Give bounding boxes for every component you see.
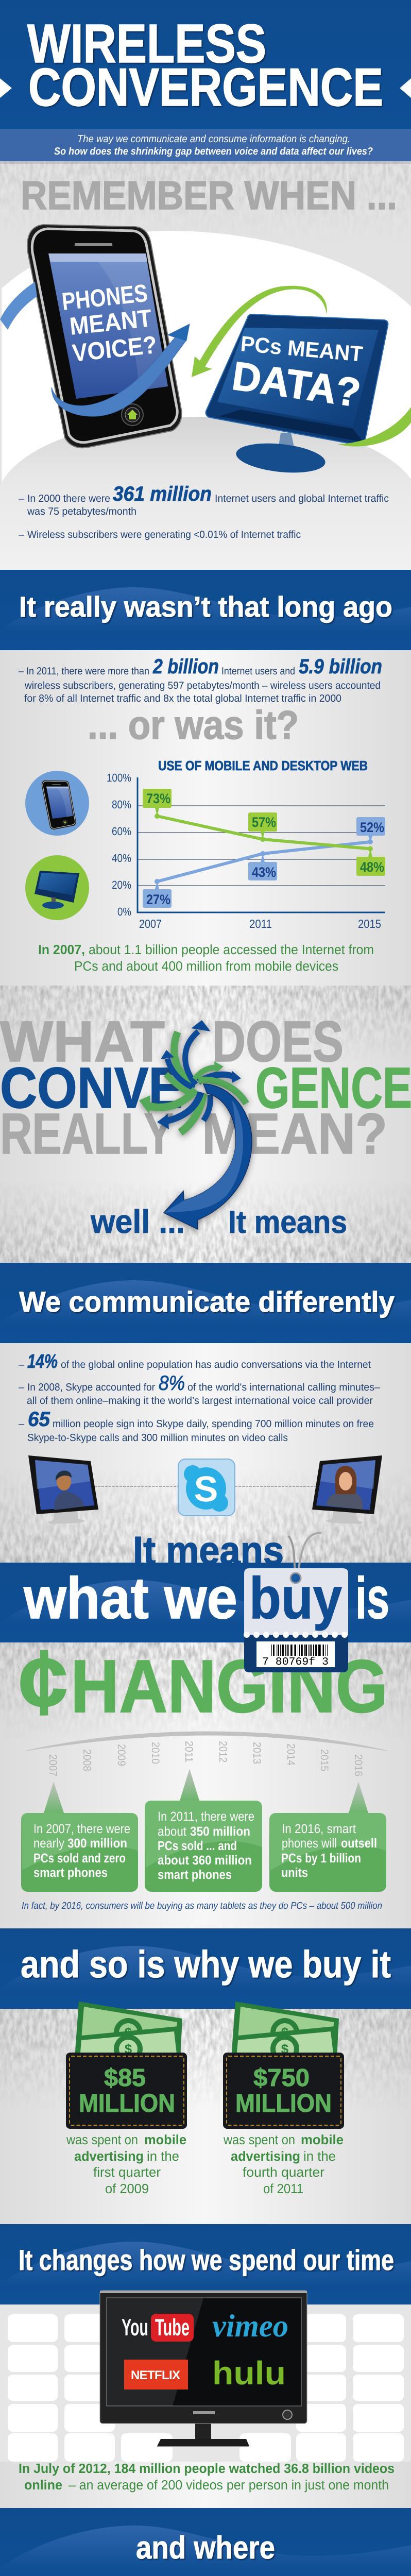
title: WIRELESS xyxy=(27,13,266,74)
panel: wallet 85 million: MILLION xyxy=(79,2089,175,2117)
panel: 2016 sales xyxy=(269,1782,386,1892)
text: mobile advertising 2009: mobile xyxy=(144,2132,186,2147)
text: mobile advertising 2009: advertising xyxy=(74,2148,144,2164)
icon: right diamond xyxy=(400,78,411,98)
barcode xyxy=(256,1641,335,1668)
heading: what does convergence really mean xyxy=(0,1009,411,1166)
text: it means: It means xyxy=(133,1529,284,1573)
panel: 2016 sales: units xyxy=(281,1866,308,1880)
header band xyxy=(0,0,411,129)
text: skype facts: In 2008, Skype accounted for xyxy=(27,1382,155,1393)
text: 2007 caption: In 2007, xyxy=(38,942,85,957)
value labels xyxy=(143,789,385,908)
markers xyxy=(155,808,373,857)
text: well it means: It means xyxy=(228,1205,347,1240)
panel: 2011 sales: about 360 million xyxy=(158,1853,252,1868)
text: year 2000 facts: was 75 petabytes/month xyxy=(27,506,136,517)
band: it really wasn't that long ago: It really wasn’t that long ago xyxy=(19,590,392,623)
timeline years: 2016 xyxy=(352,1754,364,1776)
text: 2011 facts: 2 billion xyxy=(152,655,219,678)
logo: netflix: NETFLIX xyxy=(131,2368,180,2382)
timeline years: 2013 xyxy=(251,1742,263,1764)
illustration: phone xyxy=(27,225,182,448)
arrow: blue swoosh xyxy=(0,282,190,416)
heading: what does convergence really mean: CONVE xyxy=(0,1056,183,1120)
illustration: monitor xyxy=(206,314,388,477)
text: skype facts: of the global online population has audio conversations via the Internet xyxy=(61,1359,371,1370)
tv body xyxy=(100,2291,307,2424)
logo: netflix xyxy=(124,2360,188,2389)
y axis labels: 60% xyxy=(112,825,131,838)
illustration: monitor: DATA? xyxy=(230,353,363,416)
text: skype facts: 14% xyxy=(27,1351,58,1372)
section: screens wall background xyxy=(0,2304,411,2508)
band: what we buy is xyxy=(0,1563,411,1642)
illustration: money left: $ xyxy=(125,2025,132,2040)
panel: wallet 85 million xyxy=(66,2053,187,2129)
section: convergence question background xyxy=(0,986,411,1263)
heading: or was it: ... or was it? xyxy=(88,702,299,748)
section: communicate background xyxy=(0,1343,411,1563)
text: well it means xyxy=(90,1203,347,1240)
logo: vimeo: vimeo xyxy=(212,2309,288,2344)
panel: 2007 sales: PCs sold and zero xyxy=(33,1851,126,1866)
timeline years: 2007 xyxy=(47,1754,59,1776)
text: skype facts: 65 xyxy=(28,1408,50,1431)
y axis labels: 40% xyxy=(112,852,131,865)
text: year 2000 facts: 361 million xyxy=(113,483,212,505)
section: or was it background xyxy=(0,650,411,986)
timeline arc xyxy=(26,1732,387,1751)
text: july 2012 videos xyxy=(19,2461,395,2493)
text: 2007 caption xyxy=(38,942,374,974)
text: year 2000 facts: Wireless subscribers were generating <0.01% of Internet traffic xyxy=(27,529,301,540)
band: what we buy is: what we xyxy=(23,1566,237,1631)
value labels: 73% xyxy=(146,791,170,806)
value labels: 52% xyxy=(360,820,384,835)
text: year 2000 facts: – xyxy=(19,529,25,540)
subtitle band xyxy=(0,129,411,164)
icon: monitor circle xyxy=(25,855,89,920)
timeline years xyxy=(47,1741,364,1776)
text: mobile advertising 2009: in the xyxy=(147,2148,179,2164)
band: and where: and where xyxy=(136,2530,275,2566)
icon: left diamond xyxy=(0,78,12,98)
text: skype facts: – xyxy=(19,1418,25,1430)
panel: 2011 sales: 350 million xyxy=(190,1824,250,1839)
title xyxy=(27,13,383,117)
text: mobile advertising 2011: of 2011 xyxy=(263,2181,303,2196)
text: 2011 facts: 5.9 billion xyxy=(299,655,382,678)
band: it really wasn't that long ago xyxy=(0,570,411,650)
text: mobile advertising 2009: was spent on xyxy=(66,2132,138,2147)
arrow: green swoosh xyxy=(192,286,411,447)
band: and so is why we buy it xyxy=(0,1928,411,2009)
heading: changing xyxy=(19,1631,388,1733)
y axis labels: 20% xyxy=(112,878,131,891)
text: 2007 caption: PCs and about 400 million from mobile devices xyxy=(74,958,338,974)
illustration: phone: VOICE? xyxy=(71,331,158,367)
panel: 2011 sales: smart phones xyxy=(158,1868,232,1882)
text: year 2000 facts xyxy=(19,483,389,540)
text: well it means: well ... xyxy=(90,1203,185,1240)
icon: skype: S xyxy=(194,1469,218,1509)
subtitle band: The way we communicate and consume information is changing. xyxy=(77,133,350,145)
icon: price tag with buy: buy xyxy=(249,1566,342,1631)
text: mobile advertising 2011: mobile xyxy=(301,2132,344,2147)
panel: 2007 sales: In 2007, there were xyxy=(33,1822,130,1836)
panel: 2007 sales: smart phones xyxy=(33,1866,108,1880)
logo: hulu: hulu xyxy=(212,2354,286,2392)
text: 2011 facts: wireless subscribers, generating 597 petabytes/month – wireless users accounted xyxy=(24,680,381,691)
icon: skype xyxy=(178,1459,235,1516)
text: skype facts: all of them online–making it the world’s largest international voice call provider xyxy=(27,1395,373,1406)
illustration: money left xyxy=(75,2002,182,2063)
panel: 2011 sales: about xyxy=(158,1824,186,1839)
text: 2007 caption: about 1.1 billion people accessed the Internet from xyxy=(89,942,374,957)
text: mobile advertising 2009: first quarter xyxy=(93,2164,161,2180)
text: mobile advertising 2011 xyxy=(223,2132,344,2196)
text: july 2012 videos: online xyxy=(24,2477,62,2493)
text: 2011 facts: Internet users and xyxy=(221,666,295,677)
text: skype facts: 8% xyxy=(159,1372,185,1395)
value labels: 27% xyxy=(146,892,170,907)
band: what we buy is: is xyxy=(355,1566,389,1631)
chart title: USE OF MOBILE AND DESKTOP WEB xyxy=(158,758,368,773)
panel: wallet 750 million: MILLION xyxy=(235,2089,332,2117)
panel: wallet 750 million: $750 xyxy=(253,2064,310,2092)
illustration: right video monitor xyxy=(312,1455,382,1524)
x axis labels: 2015 xyxy=(358,917,381,930)
timeline years: 2010 xyxy=(149,1742,161,1764)
illustration: left video monitor xyxy=(28,1455,98,1524)
panel: 2011 sales xyxy=(145,1769,262,1892)
panel: 2016 sales: In 2016, smart xyxy=(282,1822,356,1836)
text: mobile advertising 2011: was spent on xyxy=(223,2132,295,2147)
desktop line xyxy=(157,816,370,849)
timeline years: 2008 xyxy=(81,1749,93,1771)
text: skype facts: Skype-to-Skype calls and 300 million minutes on video calls xyxy=(27,1432,288,1444)
barcode: 7 80769f 3 xyxy=(262,1656,329,1668)
x axis labels: 2011 xyxy=(249,917,272,930)
illustration: phone: MEANT xyxy=(68,305,153,341)
band: and where xyxy=(0,2508,411,2576)
text: skype facts: – xyxy=(19,1382,25,1393)
panel: 2011 sales: PCs sold ... and xyxy=(158,1839,237,1853)
illustration: money right xyxy=(231,2002,339,2063)
panel: 2011 sales: In 2011, there were xyxy=(158,1809,254,1824)
illustration: monitor: PCs MEANT xyxy=(239,331,364,366)
text: mobile advertising 2011: in the xyxy=(303,2148,336,2164)
logo: youtube xyxy=(122,2314,194,2342)
heading: what does convergence really mean: MEAN? xyxy=(202,1101,387,1166)
text: skype facts: – xyxy=(19,1359,25,1370)
text: mobile advertising 2009 xyxy=(66,2132,186,2196)
value labels: 43% xyxy=(252,865,276,880)
heading: what does convergence really mean: WHAT xyxy=(0,1009,165,1074)
section: advertising background xyxy=(0,2009,411,2224)
section: changing background xyxy=(0,1642,411,1928)
panel: 2007 sales: 300 million xyxy=(67,1836,127,1851)
subtitle band: So how does the shrinking gap between voice and data affect our lives? xyxy=(54,146,373,157)
illustration: tv with video services xyxy=(100,2291,307,2447)
timeline years: 2009 xyxy=(115,1744,127,1766)
text: 2011 facts: for 8% of all Internet traffic and 8x the total global Internet traffic in 2000 xyxy=(24,693,341,704)
value labels: 48% xyxy=(360,859,384,875)
panel: 2007 sales: nearly xyxy=(33,1836,64,1851)
section: remember when background xyxy=(0,161,411,485)
heading: what does convergence really mean: REALLY xyxy=(0,1101,174,1166)
timeline xyxy=(26,1732,387,1776)
text: july 2012 videos: – an average of 200 videos per person in just one month xyxy=(68,2477,389,2493)
chart: use of mobile and desktop web xyxy=(107,758,385,930)
timeline years: 2012 xyxy=(217,1741,229,1762)
text: skype facts: million people sign into Skype daily, spending 700 million minutes on free xyxy=(53,1418,374,1430)
band: we communicate differently xyxy=(0,1263,411,1343)
y axis labels: 0% xyxy=(117,905,131,918)
text: skype facts: of the world's international calling minutes– xyxy=(187,1382,381,1393)
x axis labels: 2007 xyxy=(139,917,162,930)
band: it changes how we spend our time xyxy=(0,2224,411,2304)
text: july 2012 videos: In July of 2012, 184 million people watched 36.8 billion videos xyxy=(19,2461,395,2476)
text: 2011 facts: – In 2011, there were more than xyxy=(19,666,149,677)
heading: what does convergence really mean: DOES xyxy=(212,1009,344,1074)
logo: youtube: You xyxy=(122,2314,148,2341)
text: year 2000 facts: Internet users and global Internet traffic xyxy=(215,493,389,504)
tv stand xyxy=(195,2424,211,2441)
heading: changing: ¢ xyxy=(19,1631,68,1733)
text: skype facts xyxy=(19,1351,381,1444)
panel: wallet 750 million xyxy=(223,2053,344,2129)
text: mobile advertising 2011: advertising xyxy=(231,2148,300,2164)
timeline years: 2015 xyxy=(318,1749,330,1771)
text: year 2000 facts: – xyxy=(19,493,25,504)
panel: 2016 sales: phones will xyxy=(282,1836,337,1851)
text: year 2000 facts: In 2000 there were xyxy=(27,493,110,504)
illustration: money left: $ xyxy=(125,2041,132,2057)
text: mobile advertising 2009: of 2009 xyxy=(105,2181,149,2196)
panel: 2007 sales xyxy=(21,1782,138,1892)
illustration: phone: PHONES xyxy=(61,280,149,316)
panel: 2016 sales: outsell xyxy=(341,1836,377,1851)
arrow: convergence swirl xyxy=(139,1020,252,1229)
text: mobile advertising 2011: fourth quarter xyxy=(243,2164,324,2180)
icon: phone circle xyxy=(25,771,89,836)
dashed connectors xyxy=(94,1486,316,1487)
icon: price tag with buy xyxy=(244,1533,348,1672)
value labels: 57% xyxy=(252,815,276,830)
timeline years: 2014 xyxy=(285,1743,297,1766)
x axis labels xyxy=(139,917,381,930)
logo: youtube: Tube xyxy=(155,2314,190,2341)
panel: wallet 85 million: $85 xyxy=(104,2064,146,2092)
timeline years: 2011 xyxy=(183,1741,195,1762)
text: 2011 facts xyxy=(19,655,382,704)
y axis labels xyxy=(107,771,131,918)
band: we communicate differently: We communicate differently xyxy=(19,1285,395,1318)
y axis labels: 100% xyxy=(107,771,131,784)
panel: 2016 sales: PCs by 1 billion xyxy=(281,1851,361,1866)
mobile line xyxy=(157,842,370,882)
y axis labels: 80% xyxy=(112,798,131,811)
